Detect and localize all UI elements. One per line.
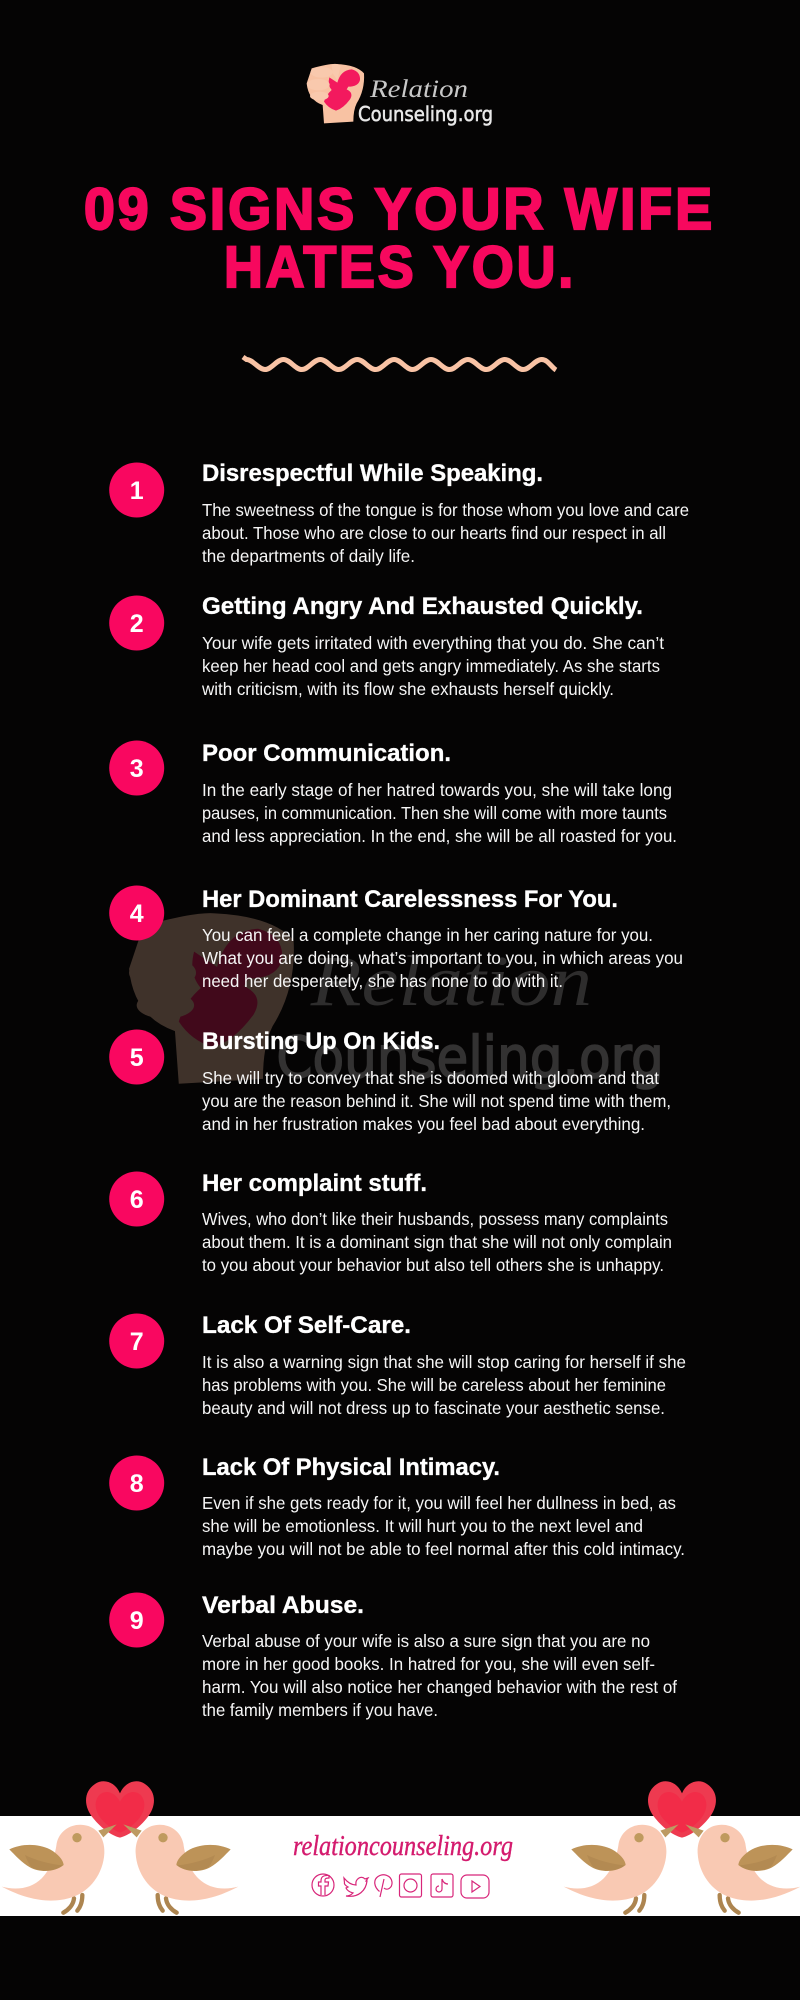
- watermark logo: [129, 913, 664, 1091]
- icon: bird right: [123, 1824, 238, 1913]
- heading 4: Her Dominant Carelessness For You.: [202, 886, 618, 913]
- body 1: about. Those who are close to our hearts find our respect in all: [202, 523, 666, 543]
- number badge 2: [109, 596, 164, 650]
- logo word: Relation: Relation: [369, 76, 468, 103]
- heading 8: Lack Of Physical Intimacy.: [202, 1454, 500, 1481]
- heading 3: Poor Communication.: [202, 740, 451, 767]
- body 5: you are the reason behind it. She will not spend time with them,: [202, 1091, 671, 1111]
- icon: twitter: [344, 1877, 368, 1896]
- wavy divider: [243, 357, 556, 370]
- number badge 4: 4: [130, 900, 144, 928]
- watermark logo: Relation: [310, 941, 592, 1021]
- item 3: [109, 740, 677, 846]
- number badge 9: [109, 1592, 164, 1648]
- body 4: need her desperately, she has none to do with it.: [202, 971, 563, 991]
- item 9: [109, 1592, 677, 1720]
- body 4: [202, 925, 683, 991]
- body 8: [202, 1493, 685, 1559]
- body 2: keep her head cool and gets angry immediately. As she starts: [202, 656, 660, 676]
- body 9: harm. You will also notice her changed behavior with the rest of: [202, 1677, 677, 1697]
- logo word: Counseling.org: Counseling.org: [358, 102, 493, 126]
- number badge 8: 8: [130, 1470, 144, 1498]
- icon: right love birds with heart: [564, 1781, 800, 1913]
- heading 2: Getting Angry And Exhausted Quickly.: [202, 593, 643, 620]
- heading 9: Verbal Abuse.: [202, 1592, 364, 1619]
- icon: facebook: [312, 1874, 334, 1896]
- number badge 2: 2: [130, 610, 144, 638]
- item 6: [109, 1170, 672, 1275]
- body 3: [202, 780, 677, 846]
- body 7: [202, 1352, 686, 1418]
- heading 6: Her complaint stuff.: [202, 1170, 427, 1197]
- number badge 4: [109, 886, 164, 940]
- number badge 3: 3: [130, 755, 144, 783]
- body 6: Wives, who don’t like their husbands, possess many complaints: [202, 1209, 668, 1229]
- body 5: She will try to convey that she is doomed with gloom and that: [202, 1068, 659, 1088]
- item 5: [109, 1028, 671, 1134]
- title: HATES YOU.: [224, 235, 576, 300]
- body 9: more in her good books. In hatred for you, she will even self-: [202, 1654, 655, 1674]
- logo: [307, 64, 493, 126]
- icon: pinterest: [375, 1875, 392, 1897]
- number badge 5: 5: [130, 1044, 144, 1072]
- title: [84, 177, 715, 300]
- number badge 8: [109, 1456, 164, 1510]
- body 3: and less appreciation. In the end, she will be all roasted for you.: [202, 826, 677, 846]
- body 1: The sweetness of the tongue is for those whom you love and care: [202, 500, 689, 520]
- body 4: What you are doing, what’s important to you, in which areas you: [202, 948, 683, 968]
- number badge 9: 9: [130, 1607, 144, 1635]
- number badge 1: [109, 462, 164, 518]
- number badge 5: [109, 1030, 164, 1084]
- body 6: about them. It is a dominant sign that she will not only complain: [202, 1232, 672, 1252]
- body 2: Your wife gets irritated with everything that you do. She can’t: [202, 633, 664, 653]
- body 8: she will be emotionless. It will hurt you to the next level and: [202, 1516, 643, 1536]
- item 7: [109, 1312, 686, 1418]
- footer website url: relationcounseling.org: [293, 1831, 513, 1862]
- body 1: the departments of daily life.: [202, 546, 415, 566]
- body 5: and in her frustration makes you feel bad about everything.: [202, 1114, 645, 1134]
- item 2: [109, 593, 664, 699]
- body 5: [202, 1068, 671, 1134]
- body 7: beauty and will not dress up to fascinate your aesthetic sense.: [202, 1398, 665, 1418]
- icon: youtube: [461, 1875, 489, 1898]
- body 8: Even if she gets ready for it, you will feel her dullness in bed, as: [202, 1493, 676, 1513]
- social icons: [312, 1874, 489, 1898]
- watermark logo: Counseling.org: [276, 1024, 664, 1091]
- icon: bird left: [2, 1824, 117, 1913]
- body 2: [201, 633, 664, 699]
- heading 7: Lack Of Self-Care.: [202, 1312, 411, 1339]
- body 2: with criticism, with its flow she exhausts herself quickly.: [201, 679, 614, 699]
- body 9: Verbal abuse of your wife is also a sure sign that you are no: [202, 1631, 650, 1651]
- body 4: You can feel a complete change in her caring nature for you.: [202, 925, 653, 945]
- number badge 1: 1: [130, 477, 144, 505]
- title: 09 SIGNS YOUR WIFE: [84, 177, 715, 242]
- number badge 6: 6: [130, 1186, 144, 1214]
- heading 1: Disrespectful While Speaking.: [202, 460, 543, 487]
- body 6: [202, 1209, 672, 1275]
- item 8: [109, 1454, 685, 1559]
- body 7: has problems with you. She will be careless about her feminine: [202, 1375, 666, 1395]
- icon: fist holding heart: [307, 64, 364, 123]
- number badge 6: [109, 1172, 164, 1226]
- heading 5: Bursting Up On Kids.: [202, 1028, 440, 1055]
- item 4: [109, 886, 683, 991]
- body 3: pauses, in communication. Then she will come with more taunts: [202, 803, 667, 823]
- body 9: [202, 1631, 677, 1720]
- number badge 7: [109, 1314, 164, 1368]
- body 6: to you about your behavior but also tell others she is unhappy.: [202, 1255, 664, 1275]
- item 1: [109, 460, 689, 566]
- icon: left love birds with heart: [2, 1781, 238, 1913]
- icon: instagram: [400, 1874, 422, 1897]
- number badge 3: [109, 740, 164, 796]
- icon: heart: [86, 1781, 154, 1838]
- body 8: maybe you will not be able to feel normal after this cold intimacy.: [202, 1539, 685, 1559]
- body 7: It is also a warning sign that she will stop caring for herself if she: [202, 1352, 686, 1372]
- body 1: [202, 500, 689, 566]
- footer band: [0, 1816, 800, 1916]
- icon: tiktok: [431, 1874, 453, 1897]
- body 3: In the early stage of her hatred towards you, she will take long: [202, 780, 672, 800]
- number badge 7: 7: [130, 1328, 144, 1356]
- body 9: the family members if you have.: [202, 1700, 438, 1720]
